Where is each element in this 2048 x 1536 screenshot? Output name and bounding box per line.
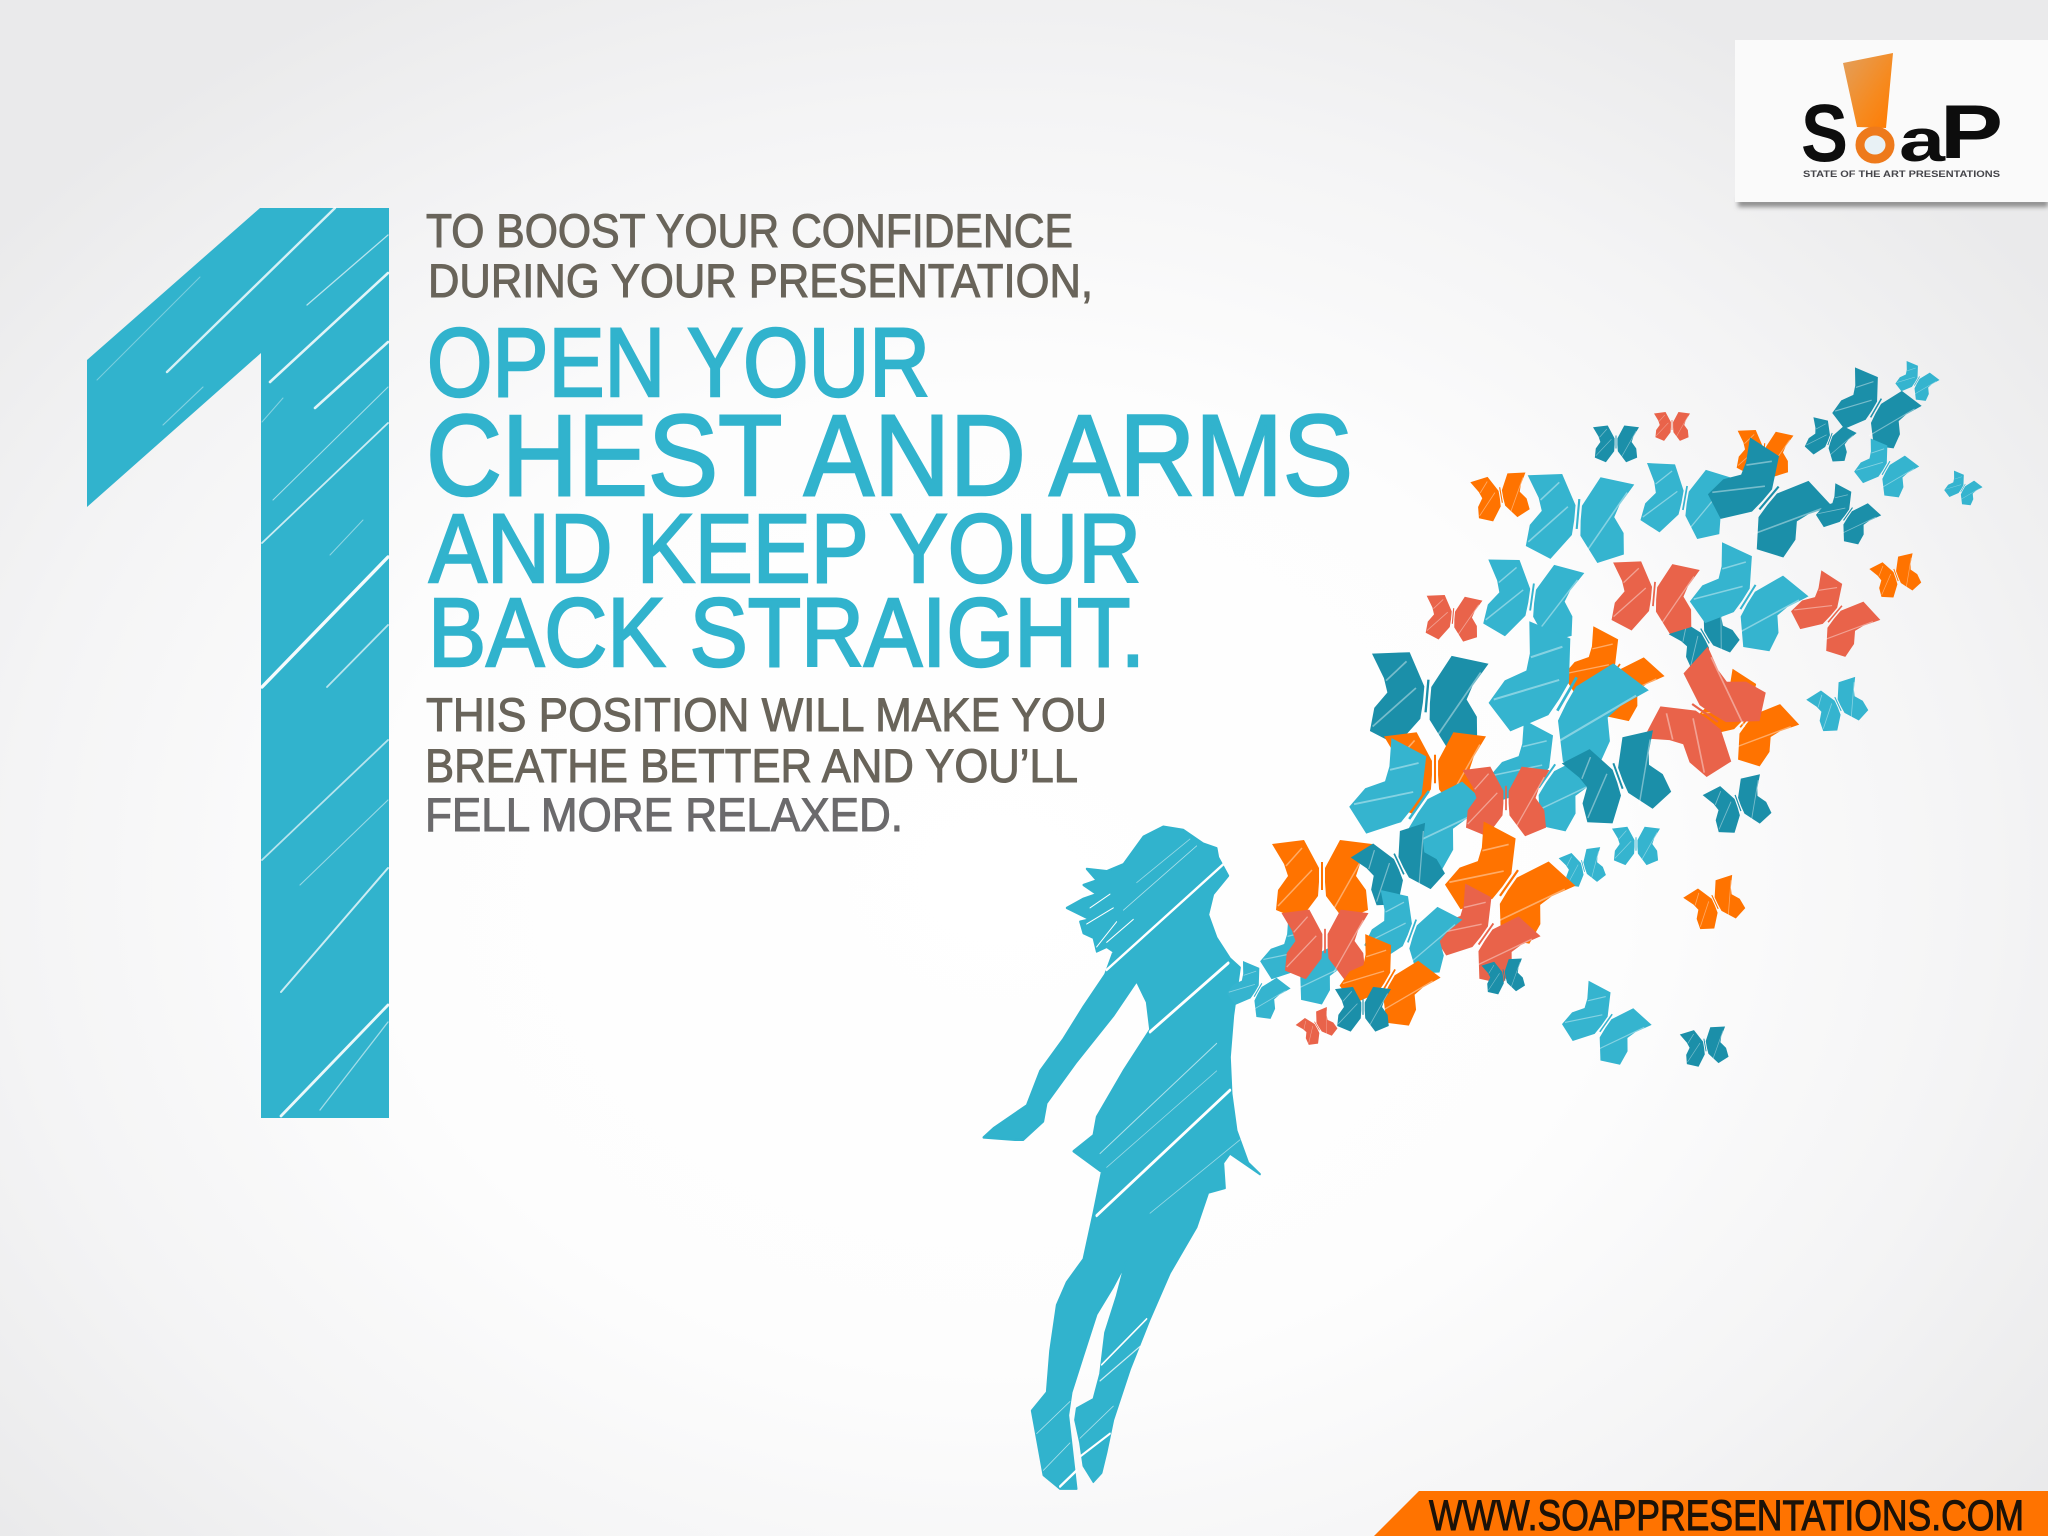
logo tagline: STATE OF THE ART PRESENTATIONS — [1803, 169, 2000, 180]
logo wordmark: S — [1801, 88, 1848, 179]
logo wordmark: a — [1899, 107, 1946, 174]
logo wordmark — [1801, 88, 2003, 179]
butterfly swarm — [1222, 360, 1983, 1073]
butterflies: central flock — [1338, 616, 1873, 884]
numeral 1 — [87, 208, 389, 1118]
butterflies: upper middle flock — [1423, 539, 1882, 674]
girl silhouette — [983, 827, 1260, 1489]
butterflies: top right flock — [1470, 360, 1983, 602]
supporting text — [425, 688, 1107, 841]
intro text: TO BOOST YOUR CONFIDENCE — [426, 204, 1073, 257]
logo panel — [1735, 40, 2048, 207]
butterflies: lower flock — [1222, 818, 1750, 1073]
footer banner — [1374, 1491, 2048, 1536]
main headline: CHEST AND ARMS — [426, 392, 1353, 520]
intro text — [426, 204, 1093, 307]
main headline: OPEN YOUR — [427, 308, 930, 417]
logo wordmark: P — [1940, 90, 2003, 175]
supporting text: THIS POSITION WILL MAKE YOU — [426, 688, 1107, 741]
main headline — [426, 308, 1353, 687]
main headline: AND KEEP YOUR — [429, 494, 1141, 603]
supporting text: BREATHE BETTER AND YOU’LL — [425, 739, 1078, 792]
logo exclamation mark — [1843, 53, 1893, 128]
supporting text: FELL MORE RELAXED. — [425, 788, 903, 841]
intro text: DURING YOUR PRESENTATION, — [428, 254, 1093, 307]
logo ring — [1860, 131, 1890, 159]
main headline: BACK STRAIGHT. — [428, 578, 1145, 687]
